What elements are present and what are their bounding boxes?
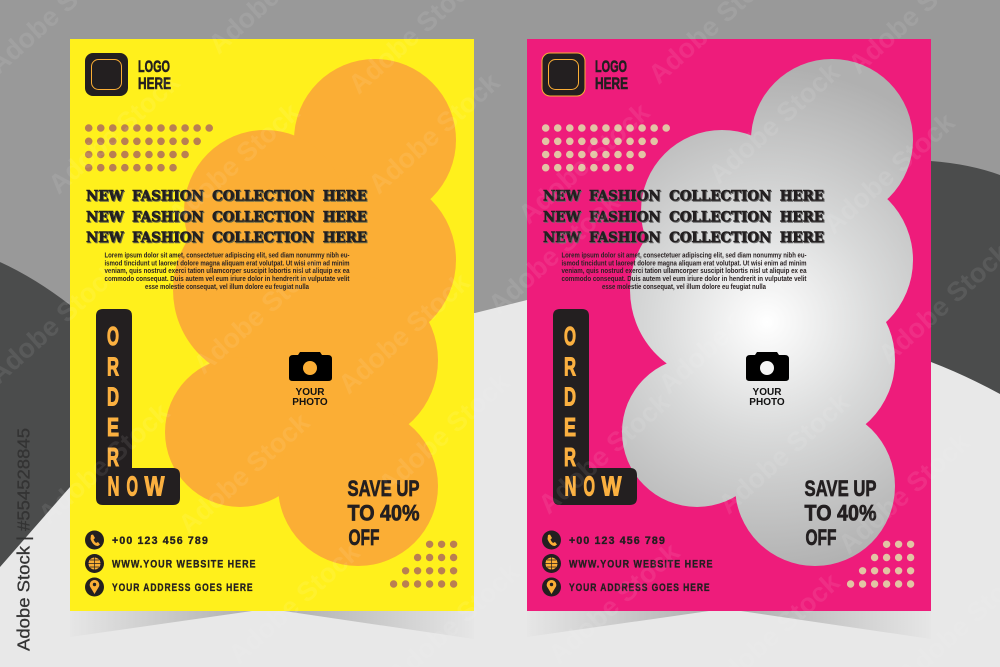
your photo label: YOUR bbox=[753, 387, 782, 398]
contact: phone bbox=[542, 530, 666, 550]
order now badge: W bbox=[144, 470, 165, 502]
order now badge: D bbox=[107, 382, 119, 412]
discount text bbox=[804, 476, 876, 550]
watermark: Adobe Stock bbox=[713, 386, 856, 520]
body text: Lorem ipsum dolor sit amet, consectetuer adipiscing elit, sed diam nonummy nibh eu- bbox=[562, 252, 807, 260]
order now badge: O bbox=[584, 470, 595, 502]
headline: NEW FASHION COLLECTION HERE bbox=[543, 210, 824, 226]
headline bbox=[86, 188, 368, 247]
logo text bbox=[138, 58, 171, 93]
side credit text: Adobe Stock | #554528845 bbox=[14, 428, 34, 651]
body text: esse molestie consequat, vel illum dolore eu feugiat nulla bbox=[145, 284, 309, 291]
headline: NEW FASHION COLLECTION HERE bbox=[87, 231, 368, 247]
headline: NEW FASHION COLLECTION HERE bbox=[544, 190, 825, 206]
watermark: Adobe Stock bbox=[223, 536, 366, 667]
body text bbox=[104, 252, 350, 291]
watermark: Adobe Stock bbox=[188, 246, 331, 380]
logo text: HERE bbox=[138, 75, 171, 93]
contact: website: WWW.YOUR WEBSITE HERE bbox=[569, 558, 714, 570]
order now badge: E bbox=[107, 412, 119, 442]
flyer shadow: pink flyer bbox=[527, 611, 931, 639]
order now badge: D bbox=[564, 382, 576, 412]
logo icon bbox=[542, 53, 585, 96]
discount text: SAVE UP bbox=[804, 476, 876, 501]
order now badge: R bbox=[564, 442, 576, 472]
logo text: LOGO bbox=[595, 58, 627, 76]
discount text bbox=[348, 476, 420, 550]
flyer: yellow bbox=[70, 39, 474, 611]
discount text: SAVE UP bbox=[348, 476, 420, 501]
contact: address bbox=[542, 578, 710, 596]
body text: commodo consequat. Duis autem vel eum iriure dolor in hendrerit in vulputate velit bbox=[104, 276, 350, 283]
contact: address: YOUR ADDRESS GOES HERE bbox=[569, 582, 710, 594]
icon: camera bbox=[289, 352, 332, 381]
icon: camera bbox=[746, 352, 789, 381]
headline: NEW FASHION COLLECTION HERE bbox=[544, 231, 825, 247]
order now badge: E bbox=[564, 412, 576, 442]
body text bbox=[562, 252, 807, 291]
watermark: Adobe Stock bbox=[163, 96, 306, 230]
photo placeholder blob bbox=[165, 59, 456, 566]
discount text: OFF bbox=[806, 525, 836, 550]
watermark: Adobe Stock bbox=[543, 536, 686, 667]
watermark: Adobe Stock bbox=[703, 56, 846, 190]
watermark: Adobe Stock bbox=[333, 266, 476, 400]
discount text: TO 40% bbox=[348, 500, 420, 526]
watermark: Adobe Stock bbox=[513, 96, 656, 230]
headline: NEW FASHION COLLECTION HERE bbox=[543, 230, 824, 246]
order now badge bbox=[96, 309, 180, 505]
watermark: Adobe Stock bbox=[173, 406, 316, 540]
discount text: TO 40% bbox=[804, 500, 876, 526]
flyer shadow: yellow flyer bbox=[70, 611, 474, 639]
contact: website bbox=[542, 554, 714, 573]
headline: NEW FASHION COLLECTION HERE bbox=[86, 210, 367, 226]
logo text: LOGO bbox=[138, 58, 170, 76]
order now badge: N bbox=[108, 470, 120, 502]
watermark: Adobe Stock bbox=[483, 186, 626, 320]
your photo label: PHOTO bbox=[292, 397, 328, 408]
headline: NEW FASHION COLLECTION HERE bbox=[544, 210, 825, 226]
your photo label bbox=[749, 387, 785, 408]
dot pattern top bbox=[89, 128, 210, 168]
body text: ismod tincidunt ut laoreet dolore magna aliquam erat volutpat. Ut wisi enim ad minim bbox=[104, 260, 350, 268]
watermark: Adobe Stock bbox=[363, 66, 506, 200]
order now badge: W bbox=[602, 470, 622, 502]
watermark: Adobe Stock bbox=[33, 396, 176, 530]
contact: website bbox=[85, 554, 256, 573]
contact: phone bbox=[85, 530, 209, 550]
headline: NEW FASHION COLLECTION HERE bbox=[87, 210, 368, 226]
contact: address bbox=[85, 578, 254, 596]
order now badge: N bbox=[564, 470, 576, 502]
your photo label bbox=[292, 387, 328, 408]
your photo label: YOUR bbox=[296, 387, 325, 398]
headline: NEW FASHION COLLECTION HERE bbox=[543, 188, 824, 204]
contact: phone: +00 123 456 789 bbox=[112, 535, 209, 547]
body text: veniam, quis nostrud exerci tation ullamcorper suscipit lobortis nisl ut aliquip ex ea bbox=[104, 268, 350, 275]
logo icon bbox=[85, 53, 128, 96]
order now badge: R bbox=[107, 352, 119, 382]
flyer: pink bbox=[527, 39, 931, 611]
watermark: Adobe Stock bbox=[43, 66, 186, 200]
watermark: Adobe Stock bbox=[533, 386, 676, 520]
order now badge bbox=[553, 309, 637, 505]
watermark: Adobe Stock bbox=[373, 366, 516, 500]
dot pattern bottom bbox=[851, 544, 912, 584]
order now badge: O bbox=[564, 321, 576, 351]
dot pattern bottom bbox=[394, 544, 455, 584]
your photo label: PHOTO bbox=[749, 397, 785, 408]
dot pattern top bbox=[546, 128, 667, 168]
headline: NEW FASHION COLLECTION HERE bbox=[86, 230, 367, 246]
headline bbox=[543, 188, 825, 247]
body text: esse molestie consequat, vel illum dolore eu feugiat nulla bbox=[602, 284, 766, 291]
body text: veniam, quis nostrud exerci tation ullamcorper suscipit lobortis nisl ut aliquip ex ea bbox=[562, 268, 807, 275]
contact: website: WWW.YOUR WEBSITE HERE bbox=[112, 558, 256, 570]
contact: phone: +00 123 456 789 bbox=[569, 535, 666, 547]
discount text: OFF bbox=[348, 525, 380, 550]
logo text bbox=[595, 58, 628, 93]
body text: Lorem ipsum dolor sit amet, consectetuer adipiscing elit, sed diam nonummy nibh eu- bbox=[104, 252, 350, 260]
order now badge: O bbox=[107, 321, 119, 351]
logo text: HERE bbox=[595, 75, 628, 93]
contact: address: YOUR ADDRESS GOES HERE bbox=[112, 582, 254, 594]
headline: NEW FASHION COLLECTION HERE bbox=[87, 190, 368, 206]
order now badge: O bbox=[126, 470, 138, 502]
watermark: Adobe Stock bbox=[653, 266, 796, 400]
order now badge: R bbox=[107, 442, 119, 472]
photo placeholder blob bbox=[622, 59, 913, 566]
body text: ismod tincidunt ut laoreet dolore magna aliquam erat volutpat. Ut wisi enim ad minim bbox=[562, 260, 806, 268]
order now badge: R bbox=[564, 352, 576, 382]
watermark: Adobe Stock bbox=[818, 106, 961, 240]
body text: commodo consequat. Duis autem vel eum iriure dolor in hendrerit in vulputate velit bbox=[562, 276, 807, 283]
watermark: Adobe Stock bbox=[833, 426, 976, 560]
headline: NEW FASHION COLLECTION HERE bbox=[86, 188, 367, 204]
